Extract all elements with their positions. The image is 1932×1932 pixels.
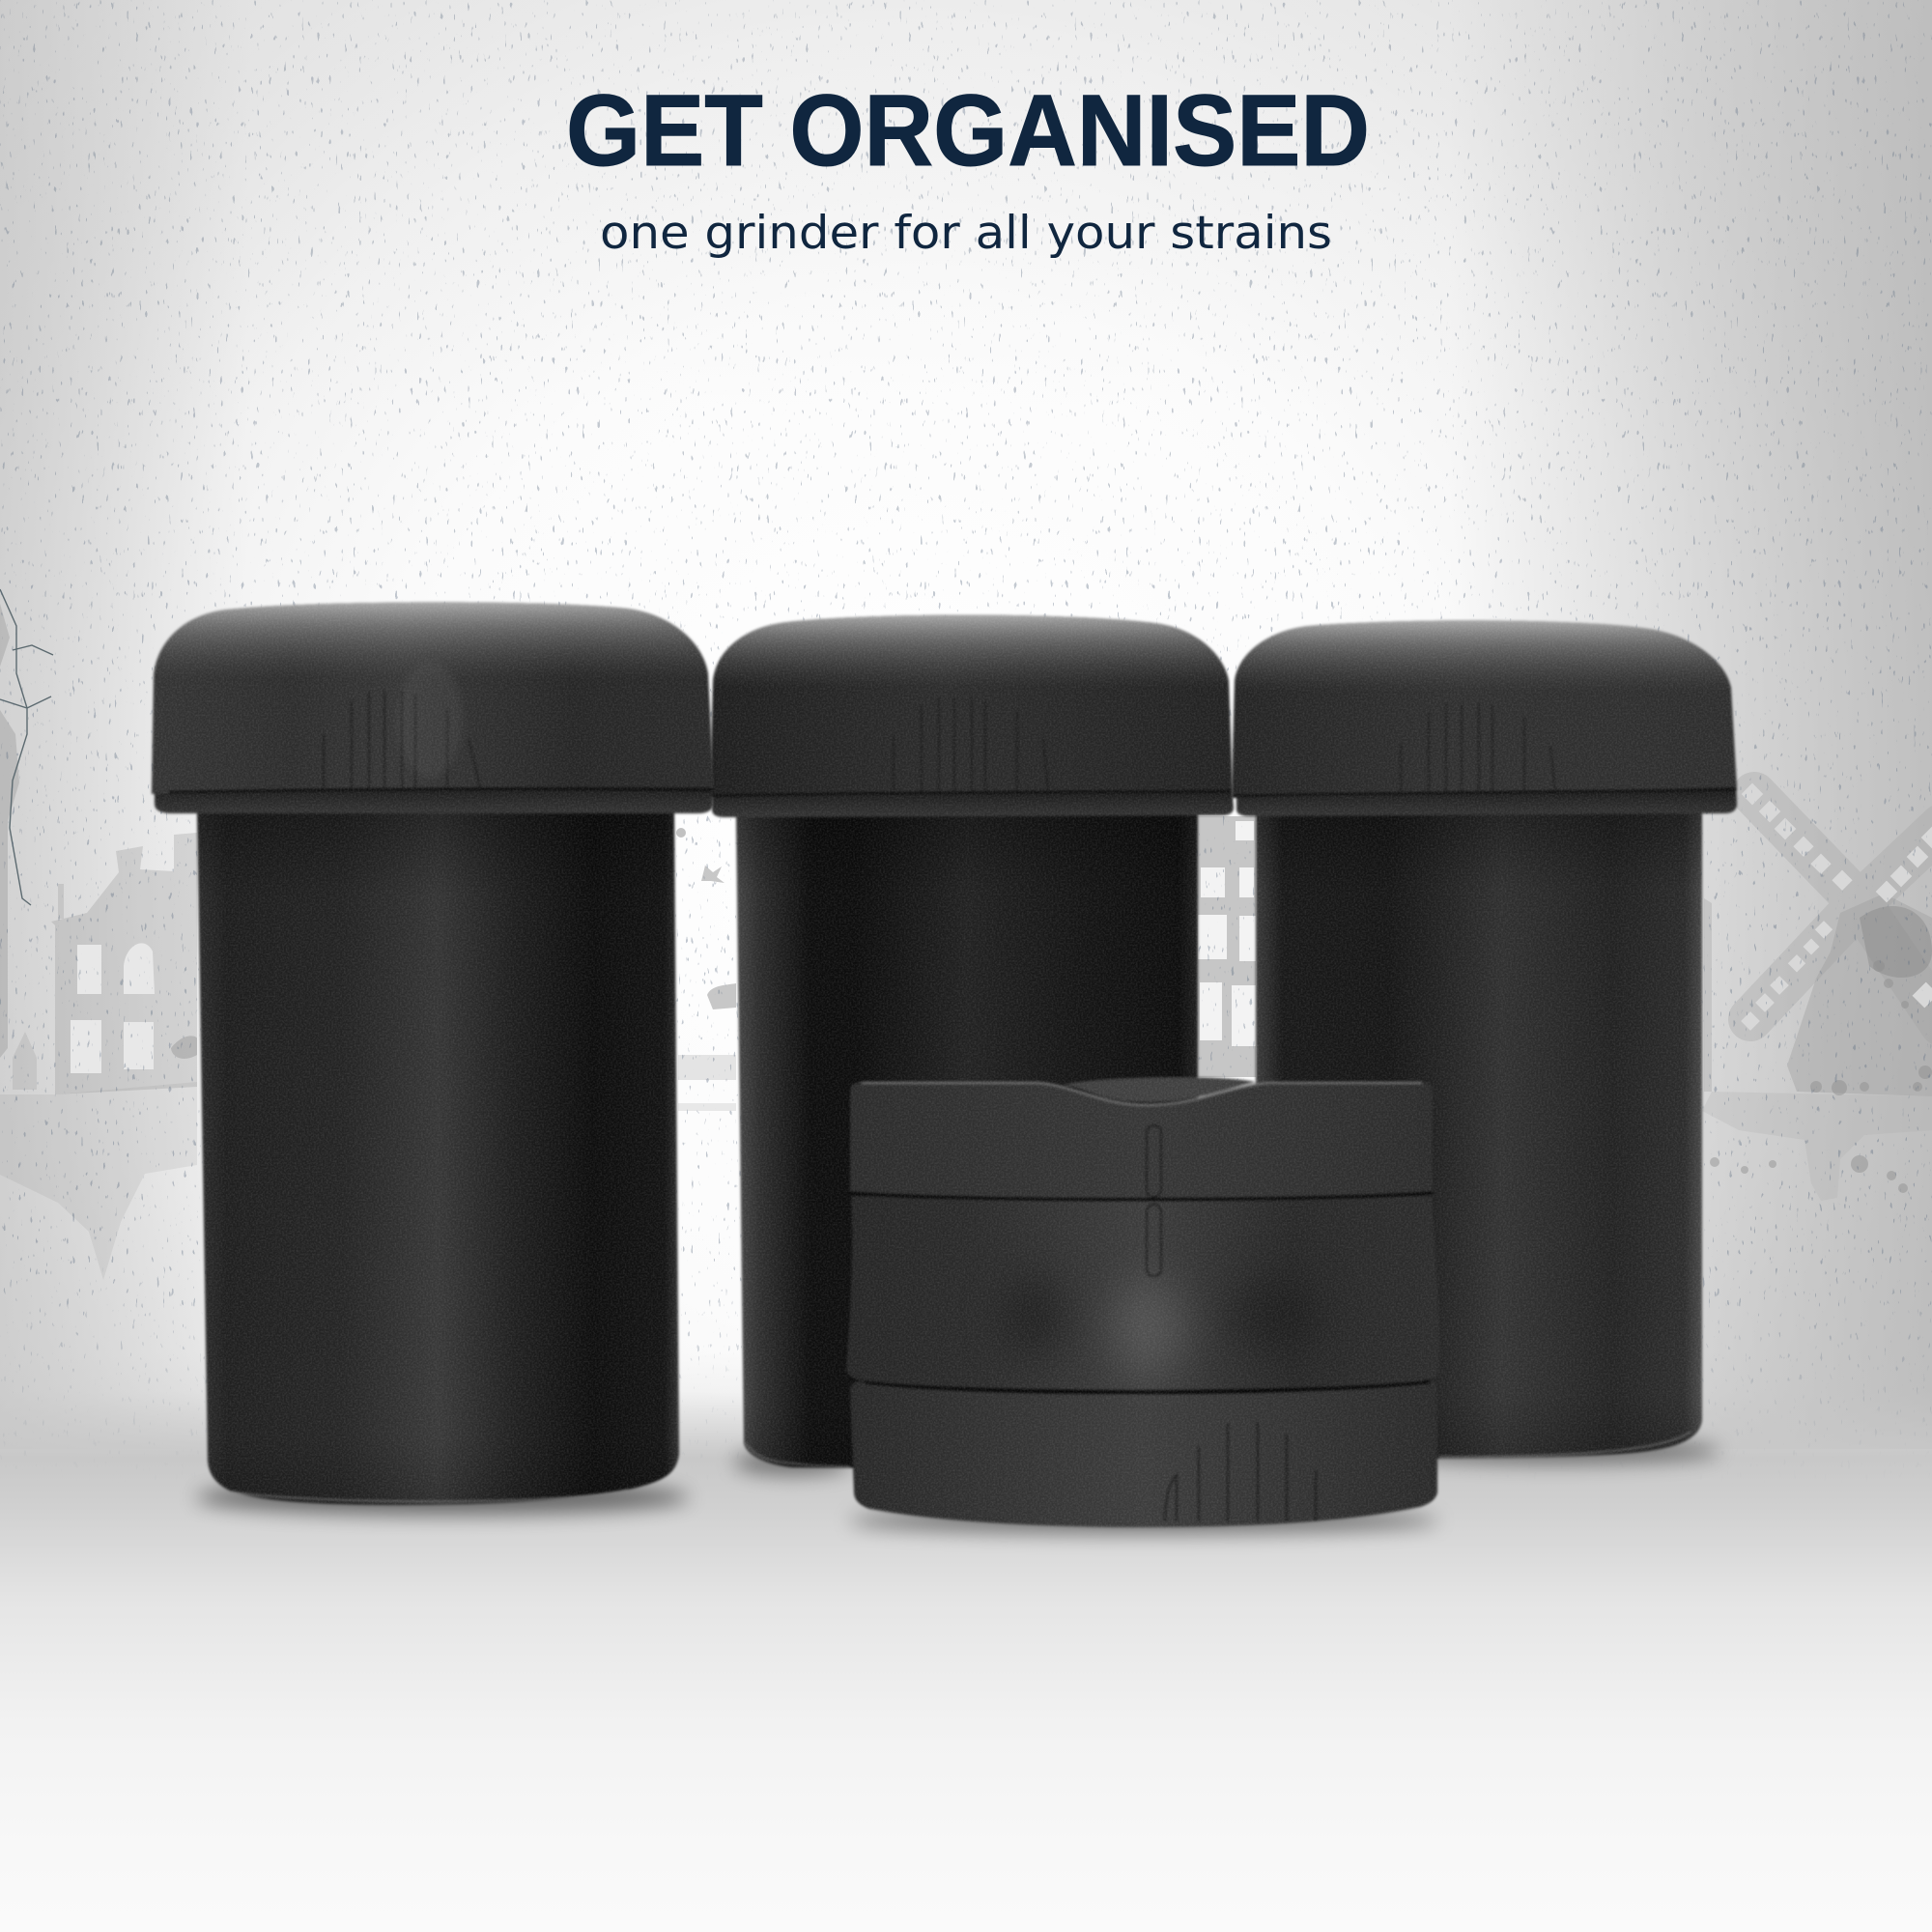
index slot bbox=[1147, 1125, 1161, 1197]
illustration: bird and splotches between jars one and two bbox=[676, 828, 736, 1111]
product: middle jar bbox=[710, 615, 1234, 1470]
ground shadows under the jars bbox=[196, 1438, 1719, 1534]
jar rim bbox=[712, 784, 1234, 817]
jar body bbox=[197, 811, 679, 1505]
illustration: cracked rock at left edge bbox=[0, 589, 53, 1058]
jar body bbox=[1256, 811, 1702, 1459]
illustration: windmill at right bbox=[1702, 783, 1932, 1201]
embossed logo bbox=[894, 697, 1048, 792]
index slot bbox=[1147, 1205, 1161, 1276]
grinder top section bbox=[850, 1077, 1433, 1200]
grinder middle section bbox=[846, 1196, 1439, 1390]
illustration: watercolor building between jars two and three bbox=[1193, 816, 1256, 1077]
jar body bbox=[736, 811, 1198, 1470]
jar lid bbox=[710, 615, 1233, 797]
texture: fine paper speckle bbox=[0, 0, 1932, 1488]
jar lid bbox=[152, 602, 714, 794]
jar rim bbox=[1236, 782, 1737, 816]
product: small stacked grinder bbox=[846, 1077, 1439, 1528]
embossed logo bbox=[1165, 1422, 1316, 1521]
grinder bottom section bbox=[850, 1381, 1437, 1528]
embossed logo bbox=[324, 691, 480, 790]
subtitle: one grinder for all your strains bbox=[600, 207, 1332, 260]
title: GET ORGANISED bbox=[566, 74, 1370, 187]
product: left jar bbox=[152, 602, 714, 1505]
illustration: watercolor house at left bbox=[0, 833, 197, 1280]
grinder gap bbox=[865, 1378, 1430, 1394]
embossed logo bbox=[1401, 703, 1555, 792]
grinder seam bbox=[850, 1193, 1433, 1200]
jar lid bbox=[1232, 620, 1737, 798]
jar rim bbox=[155, 781, 713, 813]
product: right jar bbox=[1232, 620, 1737, 1459]
